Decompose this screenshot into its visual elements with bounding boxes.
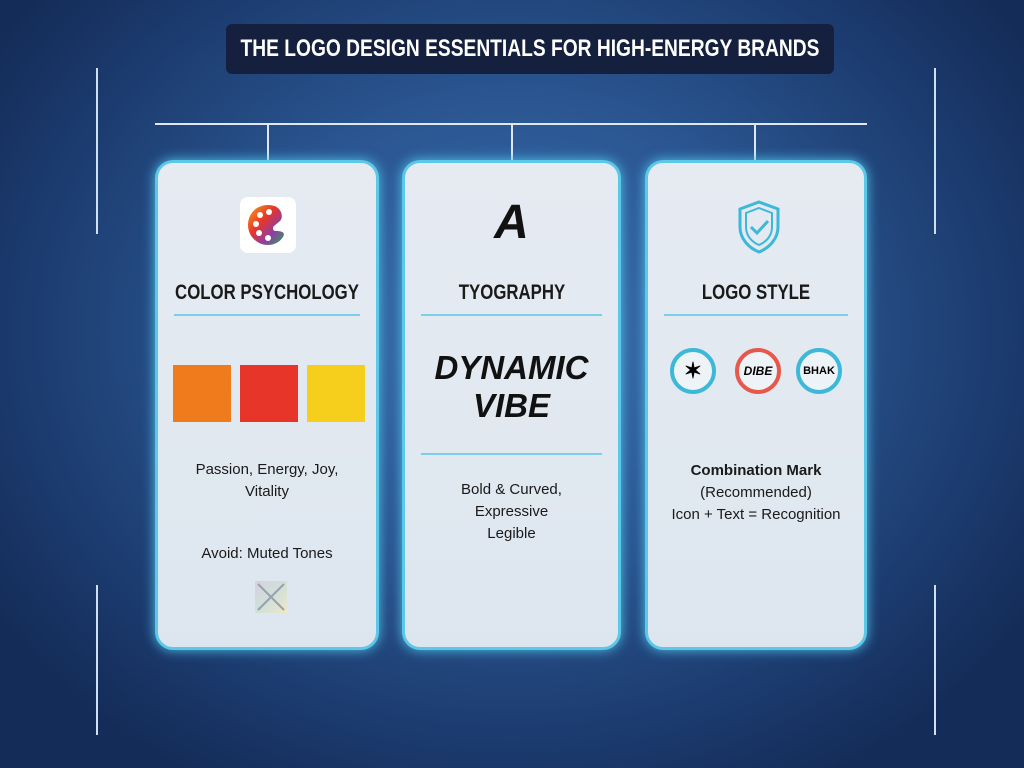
panel: logo style: Icon + Text = Recognition xyxy=(672,506,840,523)
title xyxy=(226,24,834,74)
icon: A: A xyxy=(494,196,529,249)
title: THE LOGO DESIGN ESSENTIALS FOR HIGH-ENERGY BRANDS xyxy=(241,35,819,62)
panel: typography: TYOGRAPHY xyxy=(458,281,565,304)
sample text xyxy=(434,349,589,424)
sample text: VIBE xyxy=(473,387,550,424)
text: Passion, Energy, Joy, xyxy=(196,461,338,478)
panel: color psychology xyxy=(155,160,379,650)
logo circles xyxy=(670,348,842,394)
icon: muted x xyxy=(255,581,287,613)
text xyxy=(196,461,338,500)
panel: typography: Legible xyxy=(487,525,536,542)
panel: logo style xyxy=(645,160,867,650)
logo circles: ✶ xyxy=(684,358,702,383)
panel: typography: Expressive xyxy=(475,503,548,520)
panel: logo style: LOGO STYLE xyxy=(702,281,810,304)
connector lines xyxy=(155,123,867,160)
sample text: DYNAMIC xyxy=(434,349,588,386)
heading: COLOR PSYCHOLOGY xyxy=(175,281,359,304)
logo circles: BHAK xyxy=(803,365,835,377)
panel: logo style: (Recommended) xyxy=(700,484,812,501)
text: Vitality xyxy=(245,483,289,500)
panel: logo style: Combination Mark xyxy=(691,462,821,479)
icon: shield xyxy=(738,200,780,254)
color swatches xyxy=(173,365,365,422)
logo circles: DIBE xyxy=(744,364,772,378)
icon: palette xyxy=(240,197,296,253)
panel: color psychology: Avoid: Muted Tones xyxy=(201,545,333,562)
panel: typography xyxy=(402,160,621,650)
panel: typography: Bold & Curved, xyxy=(461,481,562,498)
